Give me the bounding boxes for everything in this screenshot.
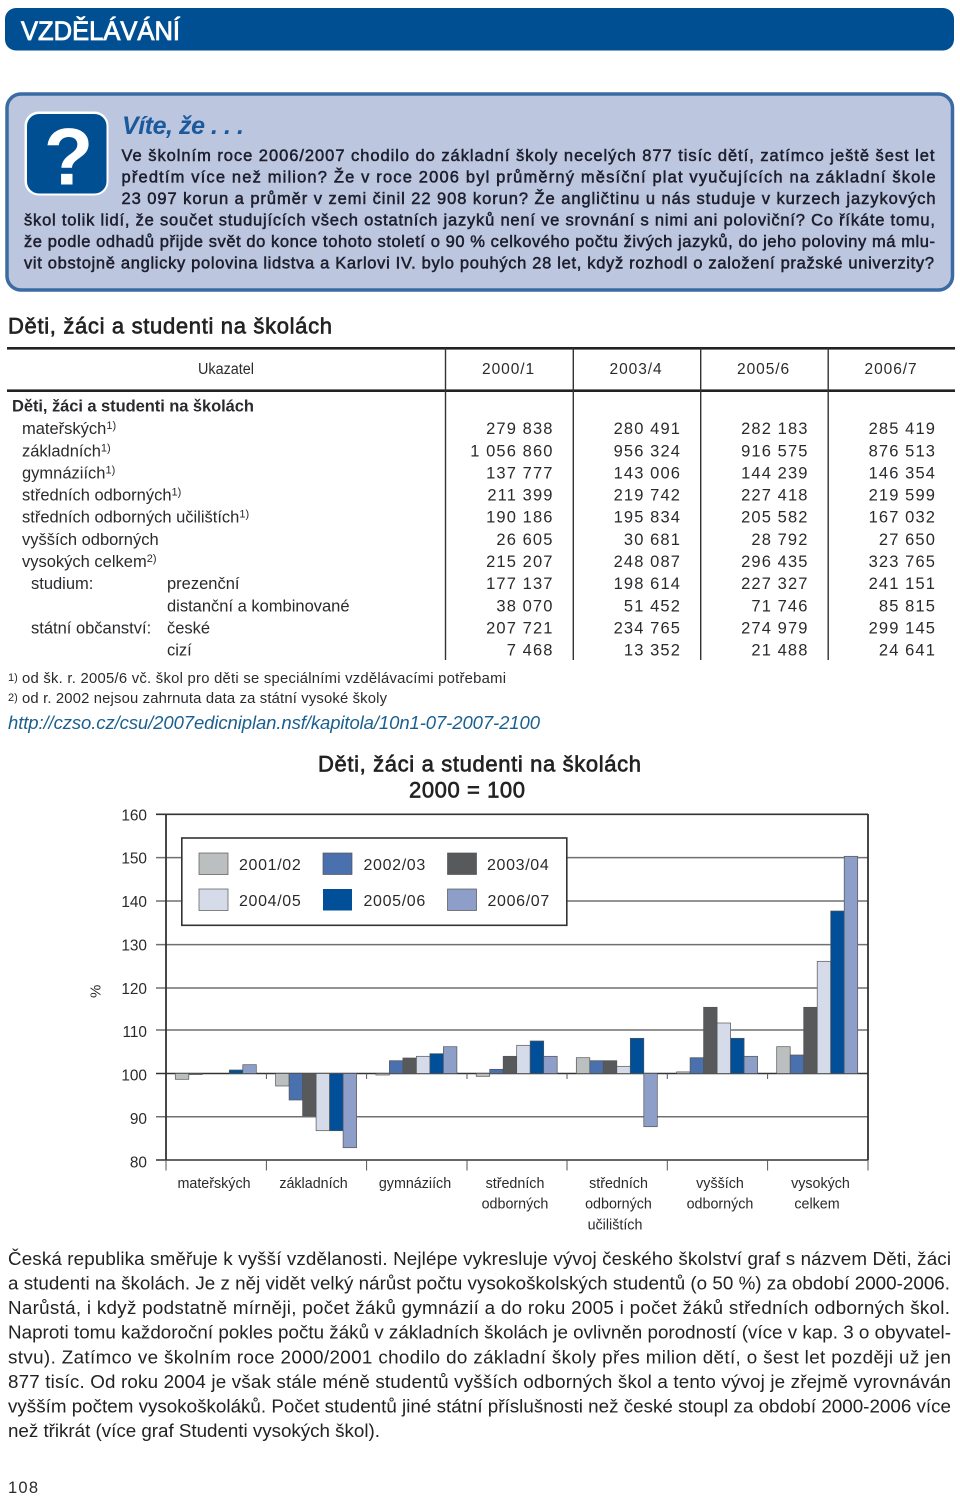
table row labels: vysokých celkem [22,553,147,571]
y axis title: % [88,985,104,998]
table row labels: 1) [106,420,116,432]
table column 2003/4 [614,420,681,660]
table header: 2006/7 [864,361,918,378]
body text: vyšším počtem vysokoškoláků. Počet studentů jiné státní příslušnosti než české stoupl za období 2000-2006 více [8,1395,951,1416]
panel text: že podle odhadů přijde svět do konce tohoto století o 90 % celkového počtu živých jazyků, do jeho poloviny má mlu- [24,233,935,251]
footnotes: od šk. r. 2005/6 vč. škol pro děti se speciálními vzdělávacími potřebami [22,671,506,687]
table column 2000/1: 207 721 [486,620,554,638]
footnotes: 1) [8,672,18,684]
table row labels: gymnáziích [22,464,105,482]
y axis labels: 110 [122,1024,147,1041]
table row labels: 1) [105,464,115,476]
header band: VZDĚLÁVÁNÍ: VZDĚLÁVÁNÍ [21,16,181,46]
body text: než třikrát (více graf Studenti vysokých škol). [8,1420,380,1441]
table column 2000/1: 26 605 [496,531,554,549]
table row labels: prezenční [167,575,240,593]
table column 2006/7: 285 419 [869,420,936,438]
table column 2005/6: 916 575 [741,442,808,460]
table row labels: 1) [239,509,249,521]
table header: 2005/6 [737,361,790,378]
bars: vysokých celkem [777,856,858,1074]
panel text [24,147,936,272]
table column 2003/4: 195 834 [614,509,681,527]
category labels: odborných [585,1196,652,1212]
bars: základních [276,1074,357,1148]
y axis labels: 90 [130,1111,147,1128]
table column 2005/6: 144 239 [741,464,808,482]
table column 2005/6: 227 327 [741,575,808,593]
table column 2003/4: 219 742 [614,487,681,505]
table column 2003/4: 280 491 [614,420,681,438]
table row labels [12,398,350,660]
table column 2000/1: 215 207 [486,553,554,571]
panel text: Ve školním roce 2006/2007 chodilo do základní školy necelých 877 tisíc dětí, zatímco ještě šest let [122,147,935,165]
header band: VZDĚLÁVÁNÍ [5,8,954,50]
table row labels: studium: [31,575,93,593]
table column 2005/6 [741,420,808,660]
chart title: Děti, žáci a studenti na školách [318,752,641,777]
y axis labels: 80 [130,1154,147,1172]
table column 2000/1: 1 056 860 [470,442,554,460]
body text: Česká republika směřuje k vyšší vzdělanosti. Nejlépe vykresluje vývoj českého školství graf s názvem Děti, žáci [8,1248,951,1269]
y axis labels: 130 [121,938,147,954]
table row labels: 1) [101,442,111,454]
table row labels: středních odborných [22,487,172,505]
table column 2006/7: 876 513 [869,442,936,460]
table column 2005/6: 274 979 [741,620,808,638]
table header [198,361,918,378]
table row labels: cizí [167,642,192,660]
legend: 2001/02 [239,857,301,874]
chart title [318,752,641,803]
legend [182,838,567,925]
category labels: středních [589,1176,648,1192]
legend: 2006/07 [488,893,550,910]
body text: Naproti tomu každoroční pokles počtu žáků v základních školách je ovlivněn porodností (více v kap. 3 o obyvatel- [8,1322,951,1342]
table row labels: Děti, žáci a studenti na školách [12,398,254,416]
panel text: předtím více než milion? Že v roce 2006 byl průměrný měsíční plat vyučujících na základní škole [122,168,936,186]
y axis labels: 150 [121,850,147,868]
panel text: vit obstojně anglicky polovina lidstva a Karlovi IV. bylo pouhých 28 let, když rozhodl o založení pražské univerzity? [24,254,934,272]
table column 2000/1: 177 137 [486,575,554,593]
table header: Ukazatel [198,361,254,378]
table column 2000/1: 211 399 [487,487,554,505]
table row labels: státní občanství: [31,620,151,638]
table row labels: vyšších odborných [22,531,159,549]
legend: 2002/03 [364,857,426,874]
body text: a studenti na školách. Je z něj vidět velký nárůst počtu vysokoškolských studentů (o 50 %) za období 2000-2006. [8,1272,950,1293]
table row labels: mateřských [22,420,106,438]
bars: středních odborných [476,1041,557,1076]
table column 2003/4: 198 614 [614,575,681,593]
category labels: učilištích [588,1218,642,1234]
footnotes: 2) [8,692,18,704]
category labels: základních [279,1176,348,1192]
category labels: vyšších [696,1176,744,1192]
body text: Narůstá, i když podstatně mírněji, počet žáků gymnázií a do roku 2005 i počet žáků středních odborných škol. [8,1297,950,1318]
table column 2000/1: 279 838 [486,420,554,438]
table row labels: základních [22,442,101,460]
table header: 2000/1 [482,361,535,378]
bars: středních odborných učilištích [576,1038,657,1127]
bars: mateřských [175,1065,256,1079]
table column 2006/7: 85 815 [879,597,936,615]
table row labels: 2) [147,553,156,565]
table row labels: české [167,620,210,638]
table column 2003/4: 956 324 [614,442,681,460]
table column 2006/7: 323 765 [869,553,936,571]
table column 2006/7: 24 641 [879,642,936,660]
table column 2000/1: 190 186 [486,509,554,527]
bars: gymnáziích [376,1047,457,1075]
bars: vyšších odborných [677,1007,758,1074]
panel: Víte, že [7,94,952,290]
legend: 2005/06 [364,893,426,910]
table column 2000/1 [470,420,554,660]
source link: http://czso.cz/csu/2007edicniplan.nsf/kapitola/10n1-07-2007-2100 [8,712,541,733]
icon: question mark: ? [44,112,93,202]
table [7,347,955,660]
table column 2005/6: 296 435 [741,553,808,571]
table column 2006/7: 299 145 [869,620,936,638]
category labels: vysokých [791,1176,850,1192]
table column 2005/6: 21 488 [751,642,808,660]
table column 2005/6: 71 746 [751,597,808,615]
y axis labels: 140 [121,894,147,911]
table column 2005/6: 28 792 [751,531,808,549]
table column 2006/7: 241 151 [869,575,936,593]
table column 2003/4: 13 352 [624,642,681,660]
y axis labels: 120 [121,981,147,998]
category labels: středních [486,1176,544,1192]
category labels: odborných [482,1196,548,1212]
table column 2000/1: 7 468 [507,642,554,660]
table column 2006/7: 146 354 [869,464,936,482]
table column 2003/4: 143 006 [614,464,681,482]
category labels: mateřských [177,1176,251,1192]
table row labels: středních odborných učilištích [22,509,239,527]
category labels: odborných [687,1196,753,1212]
footnotes [8,671,506,707]
icon: question mark [24,112,108,202]
table column 2005/6: 205 582 [741,509,808,527]
table column 2006/7: 167 032 [869,509,936,527]
panel text: 23 097 korun a průměr v zemi činil 22 908 korun? Že angličtinu u nás studuje v kurzech jazykových [122,189,936,208]
table column 2005/6: 282 183 [741,420,808,438]
table column 2000/1: 38 070 [496,597,554,615]
table column 2006/7 [869,420,936,660]
table column 2006/7: 219 599 [869,487,936,505]
body text: stvu). Zatímco ve školním roce 2000/2001 chodilo do základní školy přes milion dětí, o šest let později už jen [8,1346,951,1367]
category labels [177,1176,850,1234]
footnotes: od r. 2002 nejsou zahrnuta data za státní vysoké školy [22,691,388,707]
body text [8,1248,951,1441]
category labels: gymnáziích [379,1176,451,1192]
section heading: Děti, žáci a studenti na školách [8,314,332,338]
panel text: škol tolik lidí, že součet studujících všech ostatních jazyků není ve srovnání s nimi ani poloviční? Co říkáte tomu, [24,212,935,230]
chart title: 2000 = 100 [409,778,525,803]
panel heading: Víte, že . . . [122,112,244,140]
table column 2005/6: 227 418 [741,487,808,505]
legend: 2004/05 [239,893,301,910]
table column 2003/4: 234 765 [614,620,681,638]
table column 2006/7: 27 650 [879,531,936,549]
legend: 2003/04 [487,857,549,874]
table header: 2003/4 [610,361,663,378]
table column 2003/4: 51 452 [624,597,681,615]
table row labels: distanční a kombinované [167,597,350,615]
y axis labels [121,808,147,1172]
category labels: celkem [794,1196,840,1212]
y axis labels: 160 [121,808,147,824]
table row labels: 1) [172,487,181,499]
body text: 877 tisíc. Od roku 2004 je však stále méně studentů vyšších odborných škol a tento vývoj je zřejmě vyrovnáván [8,1371,951,1392]
y axis labels: 100 [121,1068,147,1084]
bar chart [88,808,868,1234]
table column 2003/4: 30 681 [624,531,681,549]
table column 2003/4: 248 087 [614,553,681,571]
table column 2000/1: 137 777 [486,464,554,482]
